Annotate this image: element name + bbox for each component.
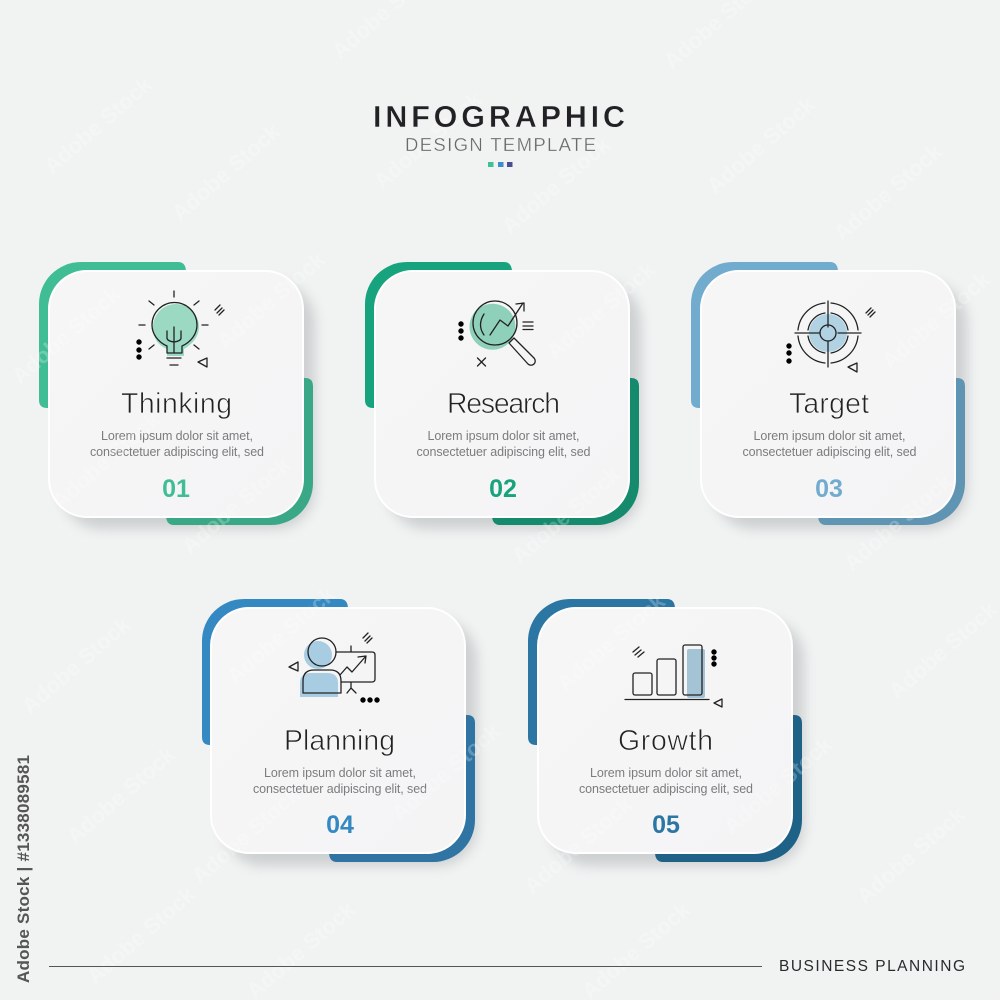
panel: Research bbox=[365, 262, 641, 529]
watermark pattern: Adobe Stock bbox=[839, 468, 957, 576]
panel: Thinking: consectetuer adipiscing elit, sed bbox=[90, 445, 264, 459]
watermark pattern: Adobe Stock bbox=[369, 86, 487, 194]
watermark pattern: Adobe Stock bbox=[552, 588, 670, 696]
title accent squares bbox=[488, 162, 512, 167]
body text: Lorem ipsum dolor sit amet, bbox=[754, 429, 906, 443]
panel: Growth: consectetuer adipiscing elit, sed bbox=[579, 782, 753, 796]
heading: Research bbox=[447, 388, 560, 420]
watermark pattern: Adobe Stock bbox=[47, 406, 165, 514]
number: 02 bbox=[489, 475, 517, 503]
heading: Growth bbox=[618, 725, 713, 757]
body text: Lorem ipsum dolor sit amet, bbox=[264, 766, 416, 780]
icon: target bbox=[786, 301, 875, 372]
title: INFOGRAPHIC bbox=[373, 100, 625, 134]
icon: light bulb bbox=[136, 291, 224, 367]
panel: Thinking bbox=[39, 262, 315, 529]
panel: Planning: consectetuer adipiscing elit, sed bbox=[253, 782, 427, 796]
number: 03 bbox=[815, 475, 843, 503]
watermark pattern: Adobe Stock bbox=[222, 581, 340, 689]
watermark pattern: Adobe Stock bbox=[167, 118, 285, 226]
number: 01 bbox=[162, 475, 190, 503]
watermark pattern: Adobe Stock bbox=[507, 461, 625, 569]
stock id side text: Adobe Stock | #1338089581 bbox=[14, 755, 33, 983]
panel: Growth bbox=[528, 599, 804, 866]
watermark pattern: Adobe Stock bbox=[829, 138, 947, 246]
panel: Target: consectetuer adipiscing elit, sed bbox=[742, 445, 917, 459]
watermark pattern: Adobe Stock bbox=[702, 91, 820, 199]
heading: Target bbox=[789, 388, 869, 420]
watermark pattern: Adobe Stock bbox=[82, 881, 200, 989]
icon: presenter with chart bbox=[289, 633, 380, 703]
watermark pattern: Adobe Stock bbox=[542, 256, 660, 364]
watermark pattern: Adobe Stock bbox=[17, 611, 135, 719]
watermark pattern: Adobe Stock bbox=[497, 131, 615, 239]
watermark pattern: Adobe Stock bbox=[187, 781, 305, 889]
footer rule bbox=[49, 966, 762, 967]
footer label: BUSINESS PLANNING bbox=[779, 958, 965, 975]
panel: Planning bbox=[202, 599, 477, 866]
body text: Lorem ipsum dolor sit amet, bbox=[101, 429, 253, 443]
watermark pattern: Adobe Stock bbox=[177, 451, 295, 559]
watermark pattern: Adobe Stock bbox=[39, 71, 157, 179]
number: 04 bbox=[326, 811, 354, 839]
icon: magnifier with arrow bbox=[458, 301, 535, 366]
watermark pattern: Adobe Stock bbox=[884, 596, 1000, 704]
watermark pattern: Adobe Stock bbox=[719, 731, 837, 839]
subtitle: DESIGN TEMPLATE bbox=[405, 134, 596, 155]
watermark pattern: Adobe Stock bbox=[852, 801, 970, 909]
watermark pattern: Adobe Stock bbox=[7, 281, 125, 389]
number: 05 bbox=[652, 811, 680, 839]
panel: Research: consectetuer adipiscing elit, sed bbox=[416, 445, 591, 459]
watermark pattern: Adobe Stock bbox=[387, 718, 505, 826]
heading: Thinking bbox=[121, 388, 232, 420]
body text: Lorem ipsum dolor sit amet, bbox=[590, 766, 742, 780]
panel: Target bbox=[691, 262, 967, 529]
icon: bar chart bbox=[625, 645, 722, 707]
watermark pattern: Adobe Stock bbox=[877, 266, 995, 374]
heading: Planning bbox=[284, 725, 395, 757]
watermark pattern: Adobe Stock bbox=[519, 791, 637, 899]
watermark pattern: Adobe Stock bbox=[212, 246, 330, 354]
body text: Lorem ipsum dolor sit amet, bbox=[428, 429, 580, 443]
watermark pattern: Adobe Stock bbox=[62, 741, 180, 849]
